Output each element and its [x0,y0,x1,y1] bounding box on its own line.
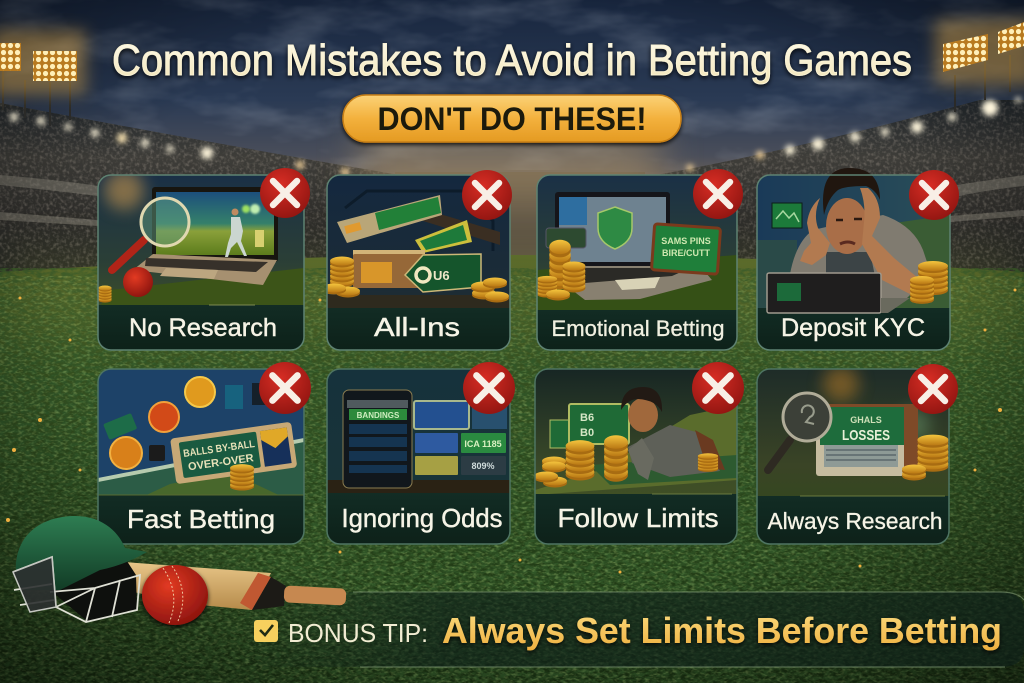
card: Deposit KYC [757,168,959,350]
banner: don't do these [343,95,681,142]
icon: red x [693,169,743,219]
icon: red x [462,170,512,220]
golden sparkles [6,288,1016,574]
icon: red x [259,362,311,414]
icon: chart [772,203,802,228]
label: Deposit KYC [781,314,925,342]
card: Follow Limits [534,362,744,544]
icon: red x [692,362,744,414]
grandstands [0,100,1024,290]
laptop [555,192,712,300]
stadium light row [10,97,1021,176]
laptop [767,273,910,313]
green tag: U6 [433,268,450,283]
floodlights [3,55,1010,126]
icon: laptop [133,187,278,285]
card: All-Ins [322,170,512,350]
label: All-Ins [374,312,460,342]
bonus tip banner [240,592,1024,667]
icon: cricket ball [123,267,153,297]
odds panels: 809% [471,461,495,471]
icon: phone: BANDINGS [357,411,400,420]
yellow note [415,220,472,253]
coins [549,240,571,289]
icon: red x [463,362,515,414]
icon: red x [908,364,958,414]
stressed person [790,168,931,310]
wallet [353,250,441,288]
icon: red x [260,168,310,218]
green sign: BIRE/CUTT [662,248,710,258]
title: Common Mistakes to Avoid in Betting Games [112,36,912,85]
person [621,387,725,480]
grass field [0,255,1024,683]
odds panels [414,401,507,475]
label: Fast Betting [127,504,275,534]
green sign: SAMS PINS [661,236,711,246]
icon: check box [254,620,278,642]
label: Emotional Betting [552,316,724,341]
icon: magnifying glass [112,198,189,270]
night sky [0,0,1024,200]
ticket [337,195,442,243]
green board: B6 [580,412,594,424]
icon: magnifying glass [768,393,831,470]
icon: shield [598,207,632,249]
icon: red cricket ball [142,565,208,625]
coins [917,435,949,472]
label: No Research [129,314,277,342]
green sign [651,224,721,274]
player figure [225,217,247,257]
icon: cricket bat [124,562,346,610]
icon: cricket helmet [13,516,147,622]
label: Always Research [768,508,942,534]
coins [566,440,594,480]
bonus tip label: BONUS TIP: [288,618,428,648]
coins [330,256,354,288]
label: Ignoring Odds [342,503,502,533]
folder and report: LOSSES [842,427,890,444]
icon: ball-by-ball board: BALLS BY-BALL [183,438,256,460]
icon: coins [103,377,268,469]
bonus tip text: Always Set Limits Before Betting [442,610,1002,651]
card: Emotional Betting [537,169,743,350]
odds panels: ICA 1185 [464,439,502,449]
folder and report [816,404,918,476]
icon: coins [98,286,112,303]
label: Follow Limits [558,503,718,533]
card: Always Research [757,364,958,544]
coins [230,464,254,491]
icon: ball-by-ball board: OVER-OVER [187,452,255,473]
folder and report: GHALS [850,415,882,425]
card: Fast Betting [98,362,311,544]
icon: ball-by-ball board [170,422,297,484]
green board: B0 [580,427,594,439]
icon: phone [343,390,412,488]
green board [550,404,629,448]
banner: don't do these: DON'T DO THESE! [378,101,646,137]
card: No Research [98,168,310,350]
green tag [405,254,481,292]
coins [918,261,948,295]
icon: red x [909,170,959,220]
card: Ignoring Odds [327,362,515,544]
